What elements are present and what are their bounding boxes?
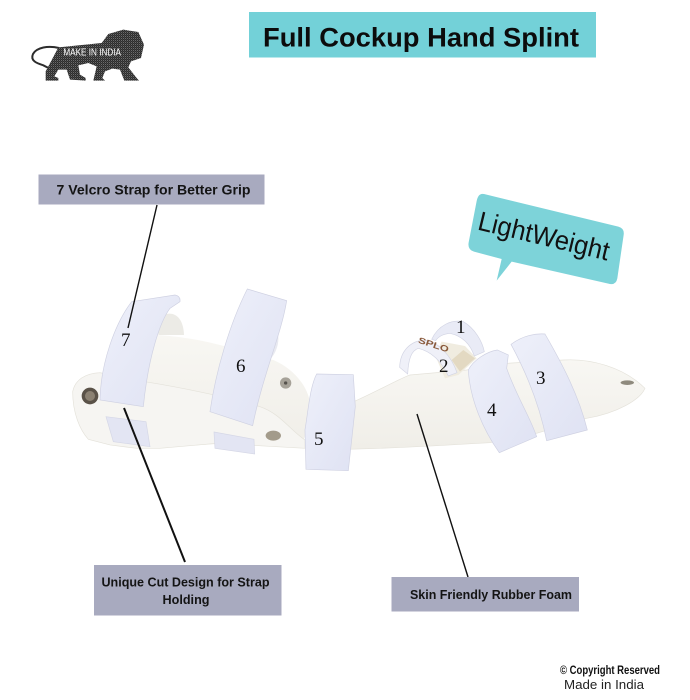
- strap 7 lower tab: [106, 417, 150, 447]
- label: cut design: [94, 565, 282, 616]
- label: rubber foam: [392, 577, 579, 612]
- title banner: [249, 12, 596, 58]
- strap numbers: 1: [456, 317, 466, 338]
- palm plate and finger straps: [348, 360, 645, 449]
- callout: LightWeight speech bubble: [468, 194, 624, 284]
- callout: LightWeight speech bubble: LightWeight: [475, 206, 613, 267]
- strap 7: [100, 295, 180, 407]
- wrist and forearm shell: [73, 289, 355, 471]
- strap numbers: 5: [314, 429, 324, 450]
- strap numbers: 4: [487, 400, 497, 421]
- label: cut design: Unique Cut Design for Strap: [102, 576, 270, 590]
- strap 4: [468, 350, 537, 453]
- strap 6: [210, 289, 287, 426]
- title banner: Full Cockup Hand Splint: [263, 22, 579, 52]
- strap numbers: 2: [439, 356, 448, 377]
- finger loops: [400, 321, 484, 378]
- label: cut design: Holding: [162, 593, 210, 607]
- leader line: rubber foam: [417, 414, 468, 577]
- label: rubber foam: Skin Friendly Rubber Foam: [410, 588, 572, 602]
- copyright note: [560, 665, 660, 692]
- finger loops: SPLO: [417, 335, 451, 354]
- strap 3: [511, 334, 587, 441]
- label: velcro strap: 7 Velcro Strap for Better Grip: [56, 182, 250, 198]
- copyright note: © Copyright Reserved: [560, 665, 660, 677]
- strap 5: [305, 374, 355, 471]
- leader line: cut design: [124, 408, 185, 562]
- strap numbers: 6: [236, 356, 246, 377]
- logo: Make in India lion: [32, 30, 144, 81]
- screw rivets: [82, 388, 98, 404]
- straps 3 and 4: [468, 334, 587, 453]
- strap numbers: 3: [536, 368, 546, 389]
- strap numbers: [121, 317, 546, 450]
- strap 6 lower tab: [214, 432, 255, 454]
- leader line: velcro strap: [128, 205, 157, 328]
- logo wordmark: MAKE IN INDIA: [63, 48, 121, 59]
- strap numbers: 7: [121, 330, 130, 351]
- copyright note: Made in India: [564, 677, 645, 692]
- product photo: hand splint: [73, 289, 645, 471]
- label: velcro strap: [38, 174, 264, 204]
